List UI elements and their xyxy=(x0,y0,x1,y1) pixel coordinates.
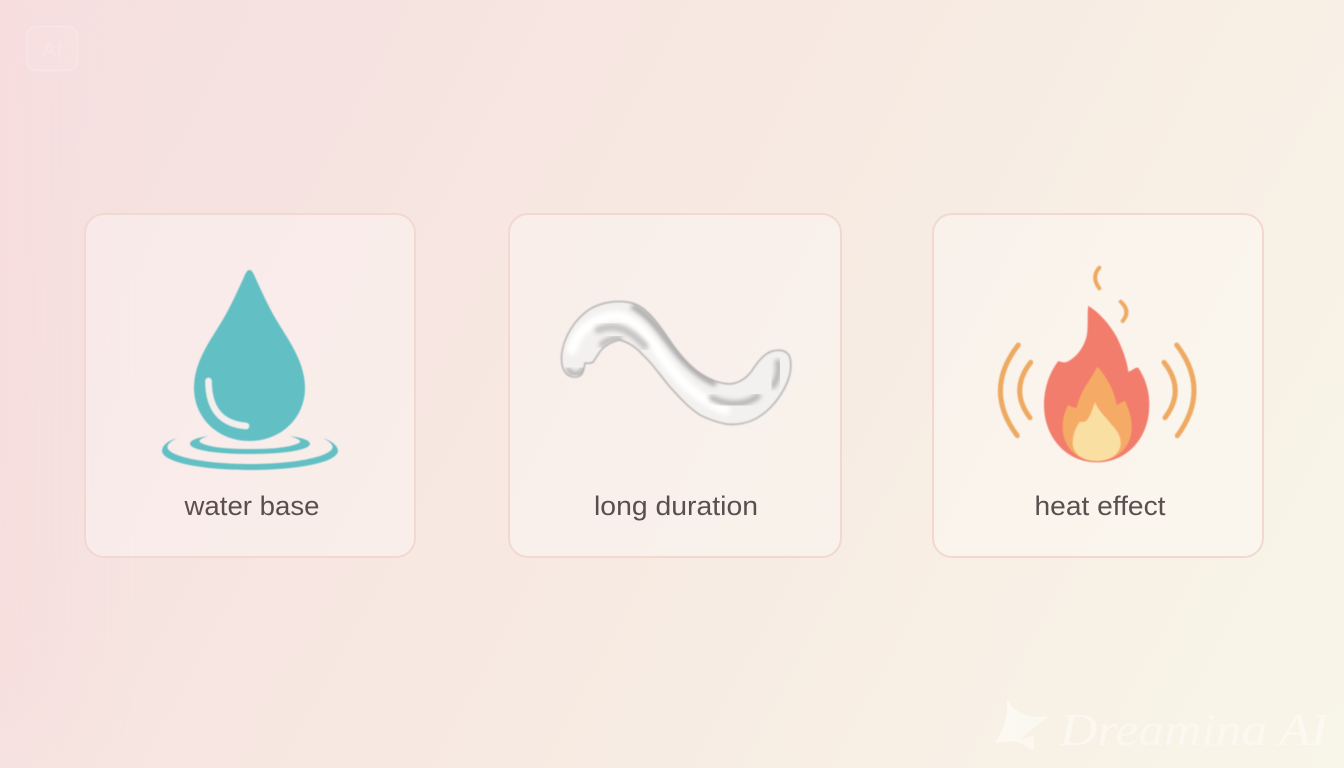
panel: heat effect xyxy=(933,214,1263,557)
watermark: Dreamina AI: Dreamina AI xyxy=(1059,705,1330,755)
panel: long duration xyxy=(509,214,841,557)
watermark logo xyxy=(995,697,1050,751)
watermark: Dreamina AI xyxy=(995,697,1330,755)
watermark: AI badge: AI xyxy=(42,39,62,62)
icon: flame with heat waves xyxy=(1000,268,1194,462)
label: water base: water base xyxy=(183,491,320,521)
panel: water base xyxy=(85,214,415,557)
label: long duration: long duration xyxy=(594,491,758,521)
watermark: AI badge xyxy=(26,26,78,70)
icon: water drop with ripples xyxy=(162,270,338,470)
icon: clear gel swirl xyxy=(561,302,791,424)
label: heat effect: heat effect xyxy=(1034,491,1166,521)
